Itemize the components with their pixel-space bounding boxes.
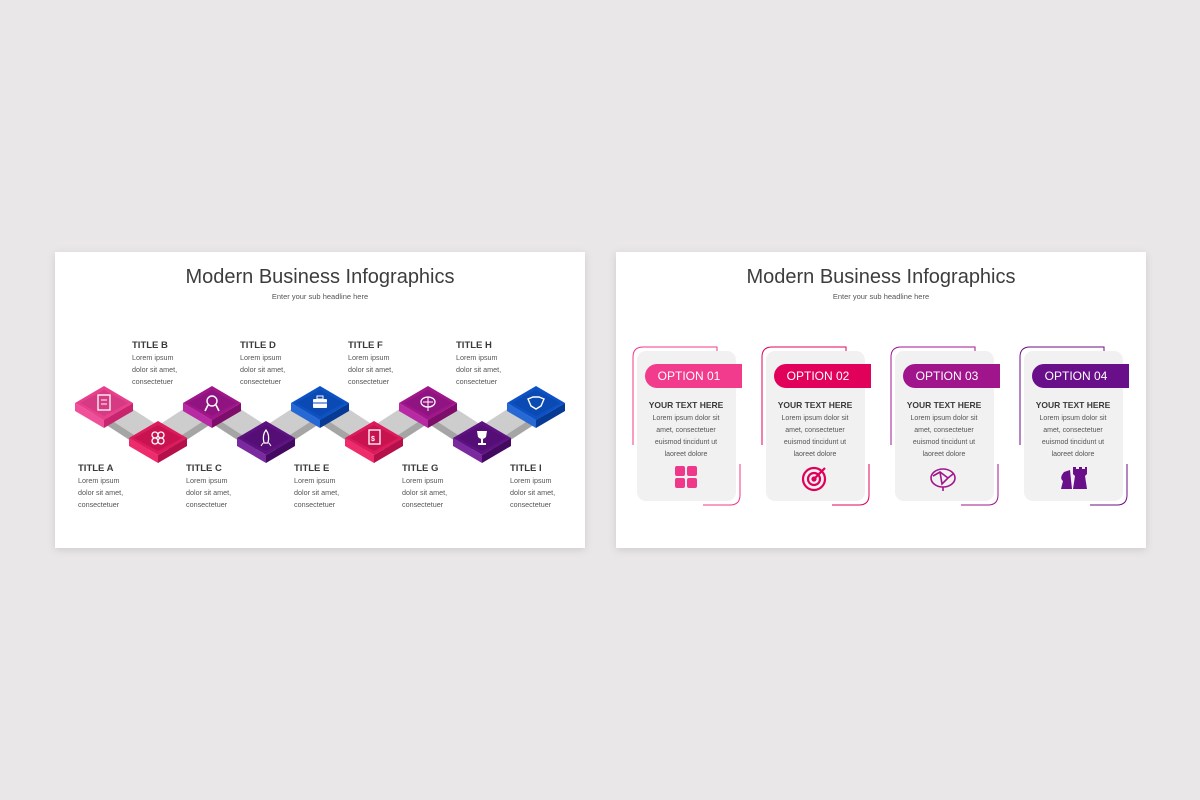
text blocks top: TITLE B	[132, 340, 168, 351]
card 3: Lorem ipsum dolor sit	[911, 415, 978, 422]
tile G	[399, 386, 457, 428]
card 1: amet, consectetuer	[656, 427, 716, 434]
card 1: euismod tincidunt ut	[655, 439, 717, 446]
tile E	[291, 386, 349, 428]
connectors	[94, 397, 546, 452]
card 2: amet, consectetuer	[785, 427, 845, 434]
card 2: OPTION 02	[787, 369, 850, 383]
card 3: amet, consectetuer	[914, 427, 974, 434]
tile H	[453, 421, 511, 463]
tile I	[507, 386, 565, 428]
card 2: euismod tincidunt ut	[784, 439, 846, 446]
card 1: Lorem ipsum dolor sit	[653, 415, 720, 422]
card 4: amet, consectetuer	[1043, 427, 1103, 434]
text blocks top: consectetuer	[240, 377, 282, 386]
card 1: YOUR TEXT HERE	[649, 400, 724, 410]
text blocks top: consectetuer	[456, 377, 498, 386]
card 3: laoreet dolore	[923, 451, 966, 458]
text blocks bottom: dolor sit amet,	[186, 488, 231, 497]
text blocks bottom: Lorem ipsum	[186, 476, 228, 485]
card 3: euismod tincidunt ut	[913, 439, 975, 446]
card 4: euismod tincidunt ut	[1042, 439, 1104, 446]
text blocks bottom: dolor sit amet,	[78, 488, 123, 497]
text blocks bottom: Lorem ipsum	[510, 476, 552, 485]
text blocks bottom: TITLE G	[402, 463, 438, 474]
text blocks top: TITLE H	[456, 340, 492, 351]
card 1: laoreet dolore	[665, 451, 708, 458]
card 4: YOUR TEXT HERE	[1036, 400, 1111, 410]
text blocks bottom: consectetuer	[294, 500, 336, 509]
card 4: Lorem ipsum dolor sit	[1040, 415, 1107, 422]
card 4: OPTION 04	[1045, 369, 1108, 383]
text blocks bottom: TITLE I	[510, 463, 542, 474]
text blocks bottom: Lorem ipsum	[294, 476, 336, 485]
text blocks bottom: Lorem ipsum	[78, 476, 120, 485]
text blocks bottom: dolor sit amet,	[510, 488, 555, 497]
tile A	[75, 386, 133, 428]
card 4: laoreet dolore	[1052, 451, 1095, 458]
text blocks bottom	[78, 463, 555, 509]
text blocks bottom: consectetuer	[186, 500, 228, 509]
tile F	[345, 421, 403, 463]
card 2: YOUR TEXT HERE	[778, 400, 853, 410]
text blocks top: Lorem ipsum	[348, 353, 390, 362]
text blocks top	[132, 340, 501, 386]
text blocks top: Lorem ipsum	[240, 353, 282, 362]
text blocks top: Lorem ipsum	[132, 353, 174, 362]
text blocks top: consectetuer	[348, 377, 390, 386]
text blocks top: Lorem ipsum	[456, 353, 498, 362]
text blocks bottom: TITLE C	[186, 463, 222, 474]
tile C	[183, 386, 241, 428]
card 2: laoreet dolore	[794, 451, 837, 458]
tile F: $	[371, 436, 375, 443]
text blocks top: dolor sit amet,	[456, 365, 501, 374]
text blocks bottom: TITLE E	[294, 463, 329, 474]
card 2: Lorem ipsum dolor sit	[782, 415, 849, 422]
panel: right slide	[616, 252, 1146, 548]
card 2	[762, 347, 871, 505]
tile D	[237, 421, 295, 463]
text blocks top: dolor sit amet,	[348, 365, 393, 374]
text blocks bottom: consectetuer	[78, 500, 120, 509]
card 4	[1020, 347, 1129, 505]
card 1: OPTION 01	[658, 369, 721, 383]
subtitle right: Enter your sub headline here	[833, 292, 929, 301]
text blocks top: TITLE D	[240, 340, 276, 351]
text blocks top: dolor sit amet,	[132, 365, 177, 374]
text blocks bottom: TITLE A	[78, 463, 114, 474]
text blocks top: TITLE F	[348, 340, 383, 351]
tile B	[129, 421, 187, 463]
card 1	[633, 347, 742, 505]
title left: Modern Business Infographics	[185, 266, 455, 288]
text blocks bottom: dolor sit amet,	[402, 488, 447, 497]
card 3: OPTION 03	[916, 369, 979, 383]
text blocks top: dolor sit amet,	[240, 365, 285, 374]
text blocks top: consectetuer	[132, 377, 174, 386]
subtitle left: Enter your sub headline here	[272, 292, 368, 301]
text blocks bottom: consectetuer	[402, 500, 444, 509]
text blocks bottom: consectetuer	[510, 500, 552, 509]
card 3	[891, 347, 1000, 505]
title right: Modern Business Infographics	[746, 266, 1016, 288]
text blocks bottom: dolor sit amet,	[294, 488, 339, 497]
panel: left slide	[55, 252, 585, 548]
card 3: YOUR TEXT HERE	[907, 400, 982, 410]
text blocks bottom: Lorem ipsum	[402, 476, 444, 485]
